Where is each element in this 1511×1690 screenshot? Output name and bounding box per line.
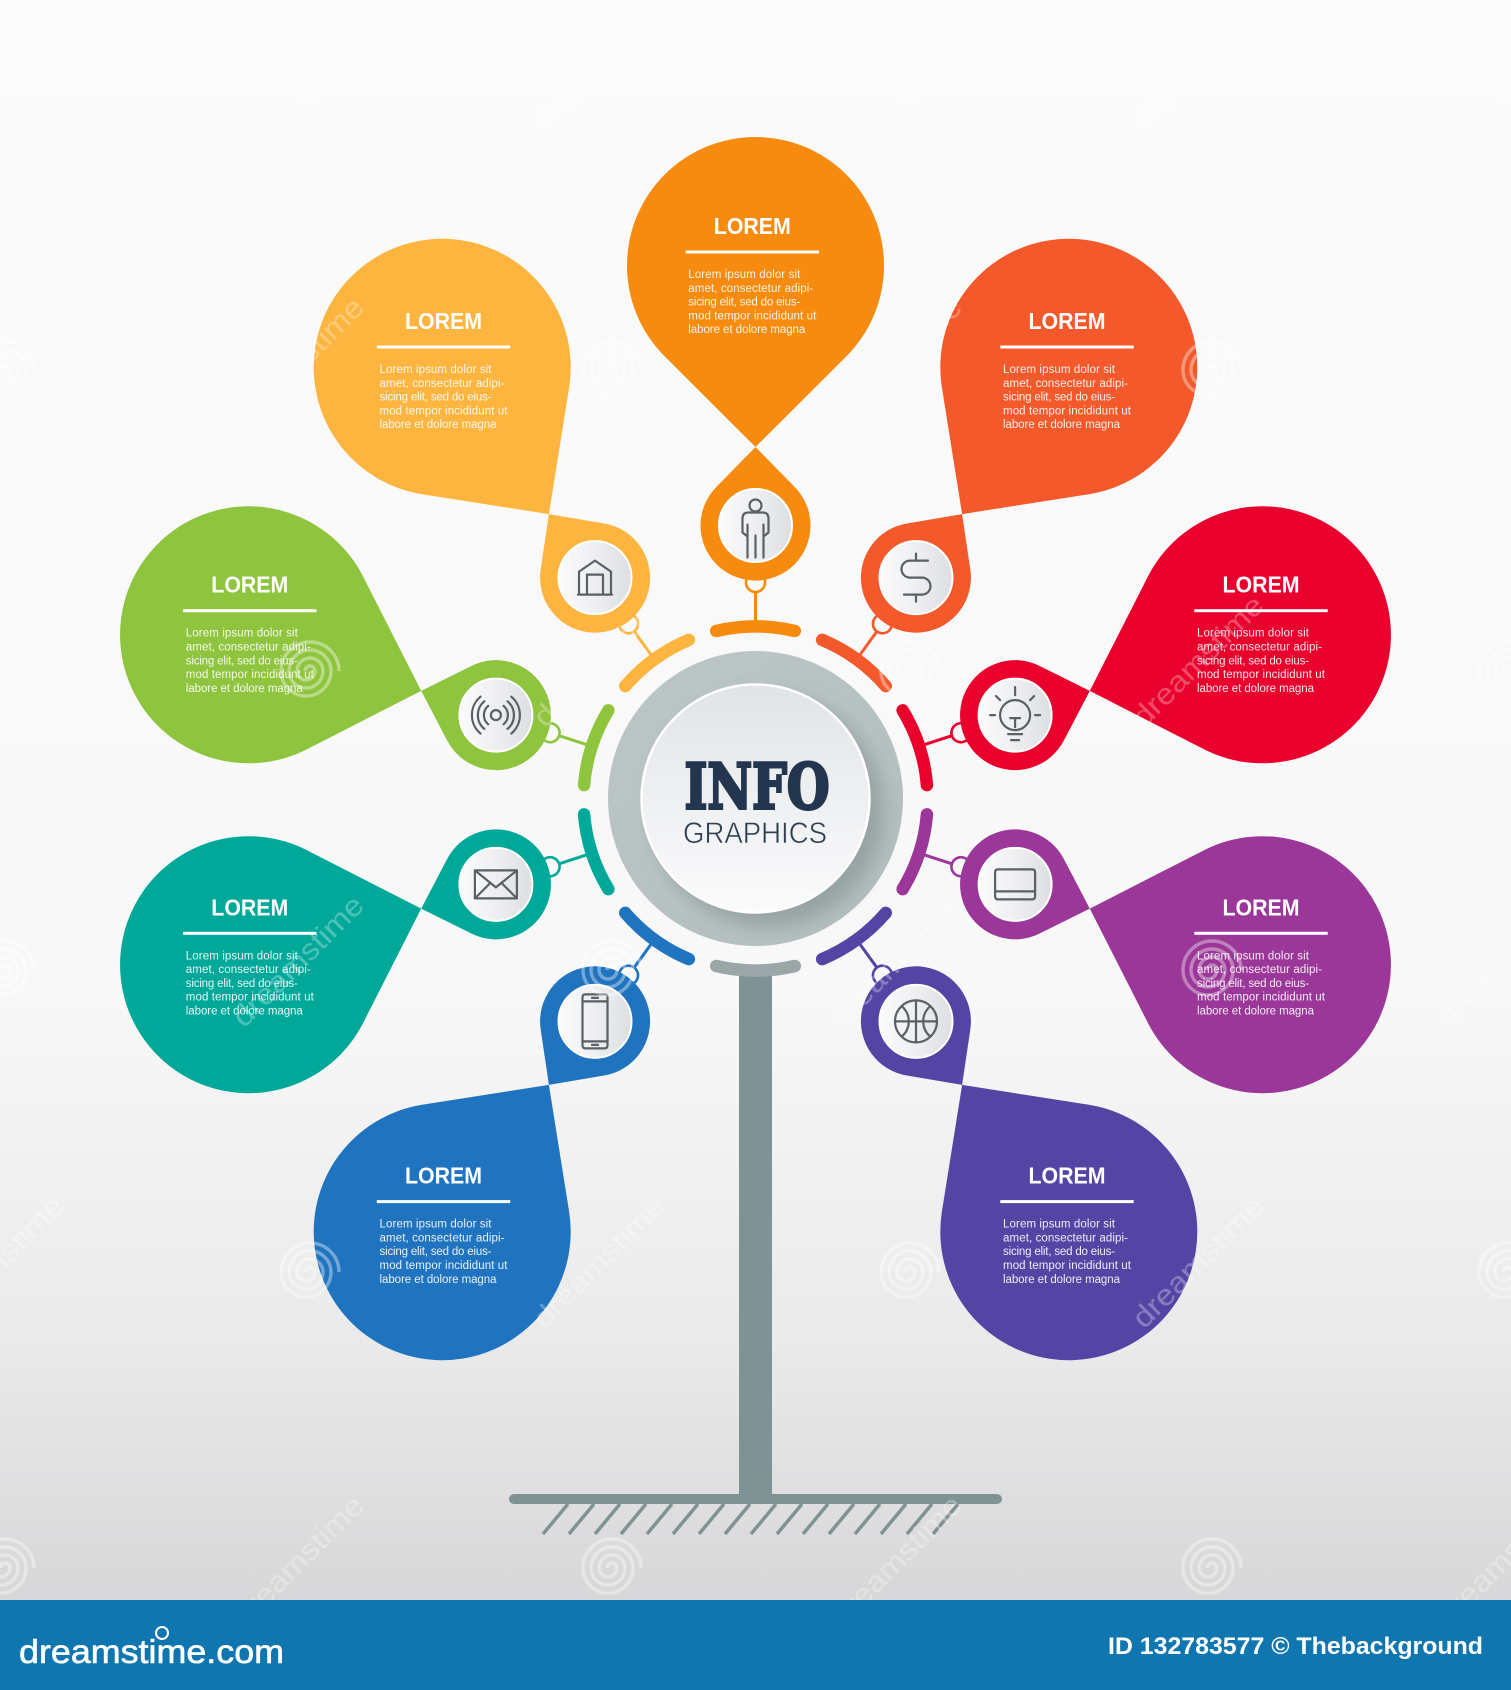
footer bar bbox=[0, 1600, 1511, 1690]
text: orange bbox=[686, 213, 819, 336]
text: purple: amet, consectetur adipi- bbox=[1197, 964, 1322, 976]
text: yellow: sicing elit, sed do eius- bbox=[380, 392, 492, 404]
watermark text: dreamstime bbox=[527, 589, 672, 734]
small drop bbox=[404, 639, 565, 784]
text: yellow: LOREM bbox=[405, 308, 482, 334]
petal: red-orange bbox=[750, 188, 1248, 739]
big drop bbox=[1050, 786, 1424, 1127]
text: red-orange: sicing elit, sed do eius- bbox=[1003, 392, 1115, 404]
text: red-orange: labore et dolore magna bbox=[1003, 419, 1121, 431]
petal: purple bbox=[875, 730, 1424, 1127]
small drop bbox=[504, 482, 672, 655]
text: yellow: labore et dolore magna bbox=[380, 419, 497, 431]
connector and arc bbox=[903, 692, 982, 785]
text: red-orange: amet, consectetur adipi- bbox=[1003, 378, 1128, 390]
text: crimson: sicing elit, sed do eius- bbox=[1197, 655, 1309, 667]
text: purple: LOREM bbox=[1222, 894, 1300, 920]
text: blue: LOREM bbox=[405, 1163, 482, 1189]
small drop bbox=[504, 944, 672, 1117]
text: blue: labore et dolore magna bbox=[380, 1274, 497, 1286]
text: green: sicing elit, sed do eius- bbox=[186, 655, 298, 667]
text: red-orange: mod tempor incididunt ut bbox=[1003, 405, 1132, 417]
connector and arc bbox=[591, 593, 689, 686]
text: indigo: LOREM bbox=[1028, 1163, 1106, 1189]
text: red-orange: Lorem ipsum dolor sit bbox=[1003, 364, 1116, 376]
big drop bbox=[1050, 473, 1424, 813]
text: red-orange: LOREM bbox=[1028, 308, 1106, 334]
bottom grey arc bbox=[716, 966, 795, 971]
icon: light bulb bbox=[979, 679, 1052, 752]
text: teal: LOREM bbox=[211, 894, 288, 920]
petal: teal bbox=[87, 730, 636, 1127]
text: teal: sicing elit, sed do eius- bbox=[186, 978, 298, 990]
text: blue: mod tempor incididunt ut bbox=[380, 1260, 508, 1272]
text: purple: mod tempor incididunt ut bbox=[1197, 992, 1326, 1004]
text: crimson bbox=[1194, 572, 1328, 695]
text: yellow: Lorem ipsum dolor sit bbox=[380, 364, 492, 376]
text: indigo: sicing elit, sed do eius- bbox=[1003, 1246, 1115, 1258]
connector and arc bbox=[591, 913, 689, 1006]
text: purple: labore et dolore magna bbox=[1197, 1005, 1315, 1017]
text: teal: labore et dolore magna bbox=[186, 1005, 303, 1017]
small drop bbox=[946, 639, 1107, 784]
watermark text: dreamstime bbox=[824, 291, 969, 436]
big drop bbox=[627, 137, 884, 447]
text: teal: amet, consectetur adipi- bbox=[186, 964, 311, 976]
text: crimson: mod tempor incididunt ut bbox=[1197, 669, 1326, 681]
petal: indigo bbox=[750, 860, 1248, 1411]
text: crimson: Lorem ipsum dolor sit bbox=[1197, 628, 1310, 640]
text: blue: sicing elit, sed do eius- bbox=[380, 1246, 492, 1258]
text: teal: mod tempor incididunt ut bbox=[186, 992, 315, 1004]
text: green: amet, consectetur adipi- bbox=[186, 642, 311, 654]
watermark text: dreamstime bbox=[1125, 0, 1270, 138]
text: red-orange bbox=[1000, 308, 1134, 431]
watermark text: dreamstime bbox=[1126, 589, 1271, 734]
footer logo swirl bbox=[156, 1627, 168, 1639]
text: orange: sicing elit, sed do eius- bbox=[688, 297, 800, 309]
stand pole bbox=[739, 972, 772, 1496]
watermark text: dreamstime bbox=[226, 1489, 371, 1634]
stand base bbox=[509, 1494, 1002, 1504]
small drop bbox=[839, 482, 1007, 655]
outer ring bbox=[608, 651, 903, 946]
ground hatching bbox=[543, 1504, 958, 1534]
text: green: labore et dolore magna bbox=[186, 683, 303, 695]
watermark text: dreamstime bbox=[824, 889, 969, 1034]
text: crimson: amet, consectetur adipi- bbox=[1197, 642, 1322, 654]
text: blue bbox=[377, 1163, 510, 1286]
inner disc bbox=[642, 684, 870, 912]
big drop bbox=[858, 1009, 1248, 1411]
icon: basketball bbox=[880, 985, 952, 1058]
big drop bbox=[87, 786, 461, 1127]
text: orange: amet, consectetur adipi- bbox=[688, 283, 813, 295]
big drop bbox=[263, 1009, 653, 1411]
petal: green bbox=[87, 473, 636, 870]
text: yellow: amet, consectetur adipi- bbox=[380, 378, 505, 390]
text: purple: sicing elit, sed do eius- bbox=[1197, 978, 1309, 990]
title: INFO: INFO bbox=[684, 750, 830, 824]
footer credit: ID 132783577 © Thebackground bbox=[1108, 1633, 1483, 1660]
watermark text: dreamstime bbox=[226, 291, 371, 436]
text: blue: Lorem ipsum dolor sit bbox=[380, 1219, 492, 1231]
petal: blue bbox=[263, 860, 761, 1411]
icon: house bbox=[558, 541, 632, 614]
text: yellow bbox=[377, 308, 510, 431]
icon: signal bbox=[459, 679, 532, 752]
text: green bbox=[183, 572, 316, 695]
text: green: Lorem ipsum dolor sit bbox=[186, 628, 299, 640]
text: indigo: Lorem ipsum dolor sit bbox=[1003, 1219, 1116, 1231]
text: indigo: labore et dolore magna bbox=[1003, 1274, 1121, 1286]
text: indigo: amet, consectetur adipi- bbox=[1003, 1232, 1128, 1244]
watermark text: dreamstime bbox=[1126, 1190, 1271, 1335]
text: orange: LOREM bbox=[714, 213, 791, 239]
text: indigo: mod tempor incididunt ut bbox=[1003, 1260, 1132, 1272]
watermark text: dreamstime bbox=[527, 1190, 672, 1335]
icon: envelope bbox=[459, 848, 532, 921]
petal: crimson bbox=[875, 473, 1424, 870]
disc shadow bbox=[652, 695, 884, 927]
title: GRAPHICS: GRAPHICS bbox=[683, 817, 827, 850]
text: crimson: labore et dolore magna bbox=[1197, 683, 1315, 695]
text: orange: labore et dolore magna bbox=[688, 324, 806, 336]
icon: dollar bbox=[880, 541, 952, 614]
connector and arc bbox=[822, 593, 920, 686]
petal: orange bbox=[627, 137, 884, 631]
centre circle bbox=[608, 651, 903, 946]
connector and arc bbox=[716, 573, 795, 631]
text: orange: mod tempor incididunt ut bbox=[688, 310, 817, 322]
small drop bbox=[946, 815, 1107, 961]
small drop bbox=[700, 447, 810, 581]
text: teal: Lorem ipsum dolor sit bbox=[186, 950, 299, 962]
icon: person bbox=[719, 489, 792, 562]
watermark text: dreamstime bbox=[226, 889, 371, 1034]
text: indigo bbox=[1000, 1163, 1134, 1286]
connector and arc bbox=[529, 814, 608, 907]
text: orange: Lorem ipsum dolor sit bbox=[688, 269, 801, 281]
text: blue: amet, consectetur adipi- bbox=[380, 1232, 505, 1244]
text: purple bbox=[1194, 894, 1328, 1018]
icon: smartphone bbox=[558, 985, 632, 1058]
petal: yellow bbox=[263, 188, 761, 739]
big drop bbox=[263, 188, 653, 590]
text: purple: Lorem ipsum dolor sit bbox=[1197, 950, 1310, 962]
connector and arc bbox=[903, 814, 982, 907]
text: yellow: mod tempor incididunt ut bbox=[380, 405, 508, 417]
text: green: mod tempor incididunt ut bbox=[186, 669, 315, 681]
footer logo: dreamstime.com bbox=[19, 1633, 284, 1670]
text: crimson: LOREM bbox=[1222, 572, 1300, 598]
big drop bbox=[858, 188, 1248, 590]
small drop bbox=[839, 944, 1007, 1117]
watermark text: dreamstime bbox=[824, 1489, 969, 1634]
text: teal bbox=[183, 894, 316, 1018]
connector and arc bbox=[529, 692, 608, 785]
connector and arc bbox=[822, 913, 920, 1006]
big drop bbox=[87, 473, 461, 813]
small drop bbox=[404, 815, 565, 961]
icon: tablet bbox=[979, 848, 1052, 921]
watermark text: dreamstime bbox=[527, 0, 672, 138]
text: green: LOREM bbox=[211, 572, 288, 598]
